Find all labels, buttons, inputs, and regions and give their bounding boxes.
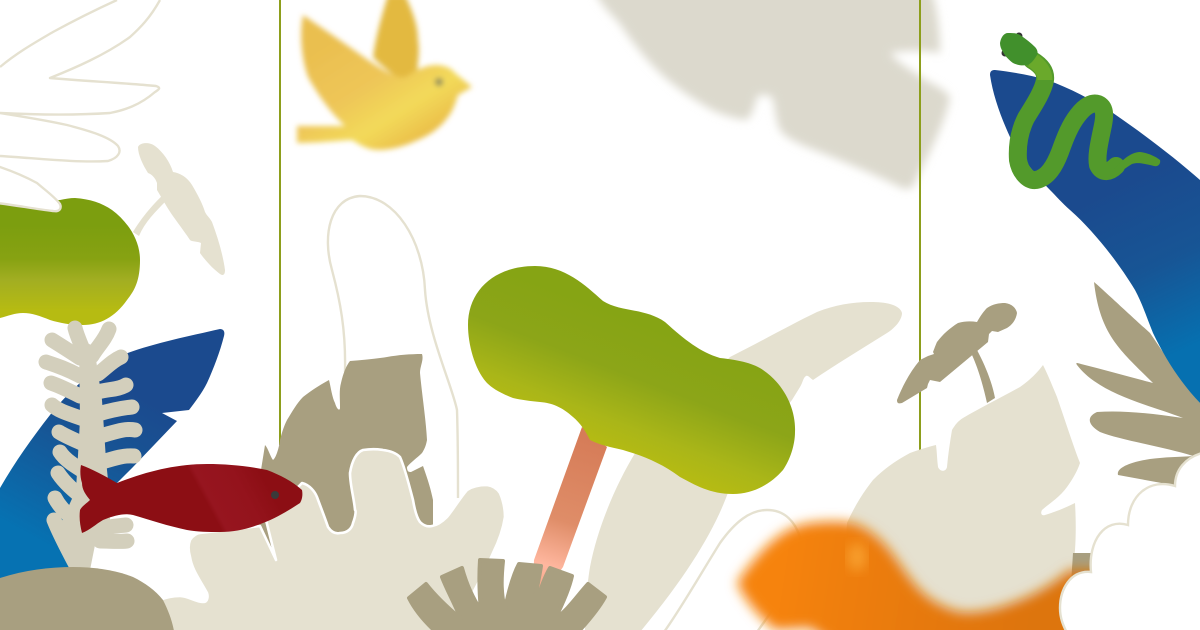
taupe small leaf right — [897, 303, 1017, 403]
white cloud right — [1060, 453, 1200, 630]
orange highlight — [847, 543, 867, 571]
blue leaf right — [990, 70, 1200, 403]
taupe fan coral — [409, 560, 605, 630]
outline leaf bottom centre — [664, 510, 801, 630]
blurred yellow bird — [297, 0, 472, 150]
cream small leaf left — [133, 143, 225, 275]
blurred orange animal — [737, 522, 1120, 630]
blurred grey leaf top — [590, 0, 950, 189]
taupe patch behind cloud — [1070, 553, 1095, 600]
red fish — [80, 464, 302, 533]
cream coral left — [46, 328, 135, 570]
green blob left — [0, 198, 140, 325]
outline leaf centre — [328, 196, 458, 498]
cream leaf right — [845, 365, 1080, 630]
green blob tree crown — [468, 266, 795, 494]
tree stem — [532, 427, 607, 612]
cream large banana leaf centre-right — [585, 302, 902, 630]
taupe palm leaf right — [1076, 282, 1200, 490]
taupe leaf centre — [255, 354, 433, 553]
outline leaf tip over blob — [0, 166, 61, 211]
cream big leaf centre — [160, 449, 505, 630]
outline leaves top left — [0, 0, 160, 161]
panel divider lines — [280, 0, 920, 450]
grey mound bottom left — [0, 567, 174, 630]
green snake — [1000, 32, 1160, 180]
blue leaf left — [0, 329, 224, 580]
